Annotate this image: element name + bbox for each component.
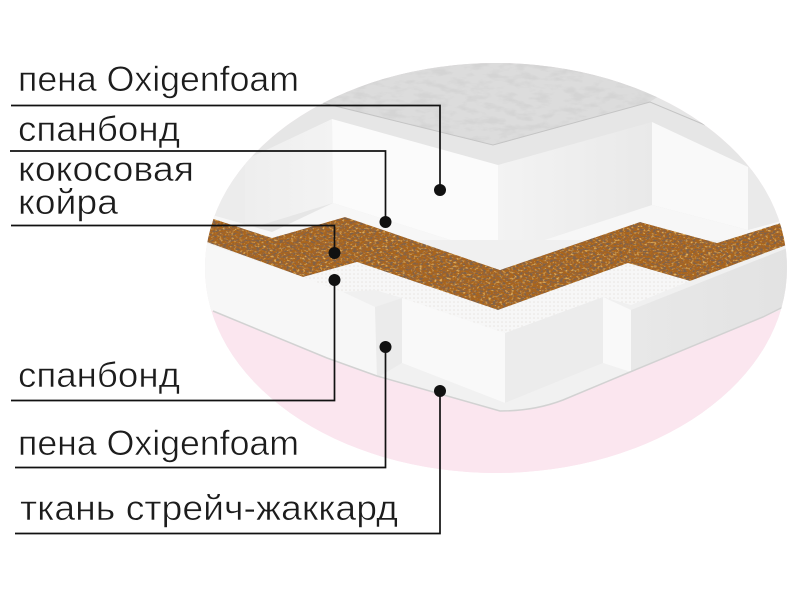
label: coconut coir: кокосовая <box>18 150 194 189</box>
label: spunbond lower <box>11 274 340 400</box>
label: stretch jacquard fabric: ткань стрейч-жаккард <box>20 489 398 528</box>
upper spunbond layer <box>214 203 780 240</box>
background oval: pink base <box>205 63 787 473</box>
mattress cross-section illustration <box>205 63 787 412</box>
quilted fabric top surface <box>324 63 657 144</box>
label: spunbond upper <box>10 110 392 228</box>
coconut coir layer <box>200 214 800 310</box>
lower spunbond layer <box>303 262 690 333</box>
label: coconut coir <box>11 150 340 259</box>
label: foam top: пена Oxigenfoam <box>18 60 299 99</box>
fabric edge lines <box>323 102 705 145</box>
lower foam layer <box>200 240 800 420</box>
upper foam layer <box>214 98 780 240</box>
label: spunbond lower: спанбонд <box>18 356 180 395</box>
pink lower background with mattress edge <box>212 310 780 420</box>
label: foam bottom: пена Oxigenfoam <box>18 424 299 463</box>
label: spunbond upper: спанбонд <box>18 110 180 149</box>
label: foam top <box>11 60 446 196</box>
label: foam bottom <box>15 341 392 468</box>
label: stretch jacquard fabric <box>15 385 446 534</box>
label: coconut coir: койра <box>18 183 119 222</box>
